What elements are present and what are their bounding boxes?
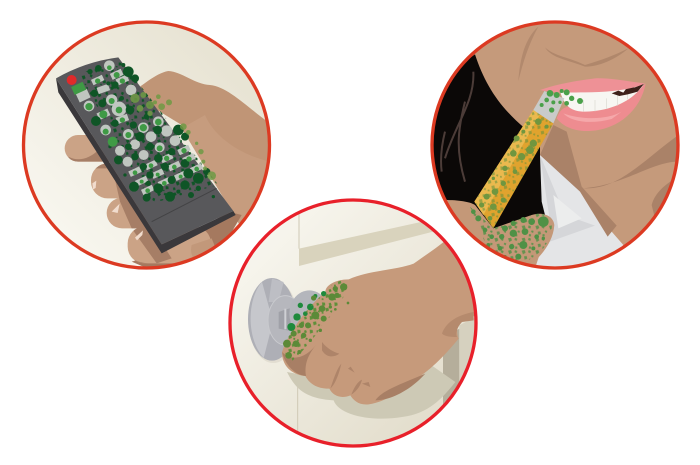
germs on fingers <box>471 209 549 260</box>
cigarette paper <box>533 91 564 123</box>
door frame shadow <box>443 329 459 405</box>
hand cast shadow <box>287 366 455 418</box>
germs on cigarette paper and teeth <box>540 89 583 113</box>
panel: remote control <box>23 22 272 272</box>
panel: cigarette and mouth <box>425 15 685 278</box>
germ speckle on fingers <box>283 280 347 363</box>
teeth <box>560 83 644 112</box>
circle border: door panel <box>230 200 476 446</box>
germs on fingers: olive green <box>283 283 349 359</box>
circle border: cigarette panel <box>432 22 678 268</box>
icon: hand on knob <box>282 242 485 404</box>
germ speckle on filter <box>474 110 553 228</box>
hair <box>434 54 545 228</box>
germs on thumb: olive green <box>130 92 216 180</box>
circle border: remote panel <box>23 22 269 268</box>
germ speckle on fingers <box>470 207 552 262</box>
icon: door knob <box>248 278 329 363</box>
collar <box>536 155 624 266</box>
germ speckle on remote <box>78 62 218 203</box>
germs on filter <box>479 118 549 221</box>
germs on remote: dark green <box>87 63 215 202</box>
lips <box>540 78 646 131</box>
icon: hand holding remote <box>65 71 272 272</box>
panel: door knob <box>230 200 485 446</box>
door panel moulding <box>299 222 433 266</box>
germs on knob: bright green <box>287 291 326 331</box>
cigarette filter <box>474 110 553 228</box>
face shadows <box>518 27 682 237</box>
icon: remote control body <box>56 57 236 253</box>
germs on remote: bright green <box>71 65 199 193</box>
hand fingers holding cigarette <box>446 200 554 258</box>
remote buttons <box>76 60 203 195</box>
icon: red power button <box>67 75 77 85</box>
